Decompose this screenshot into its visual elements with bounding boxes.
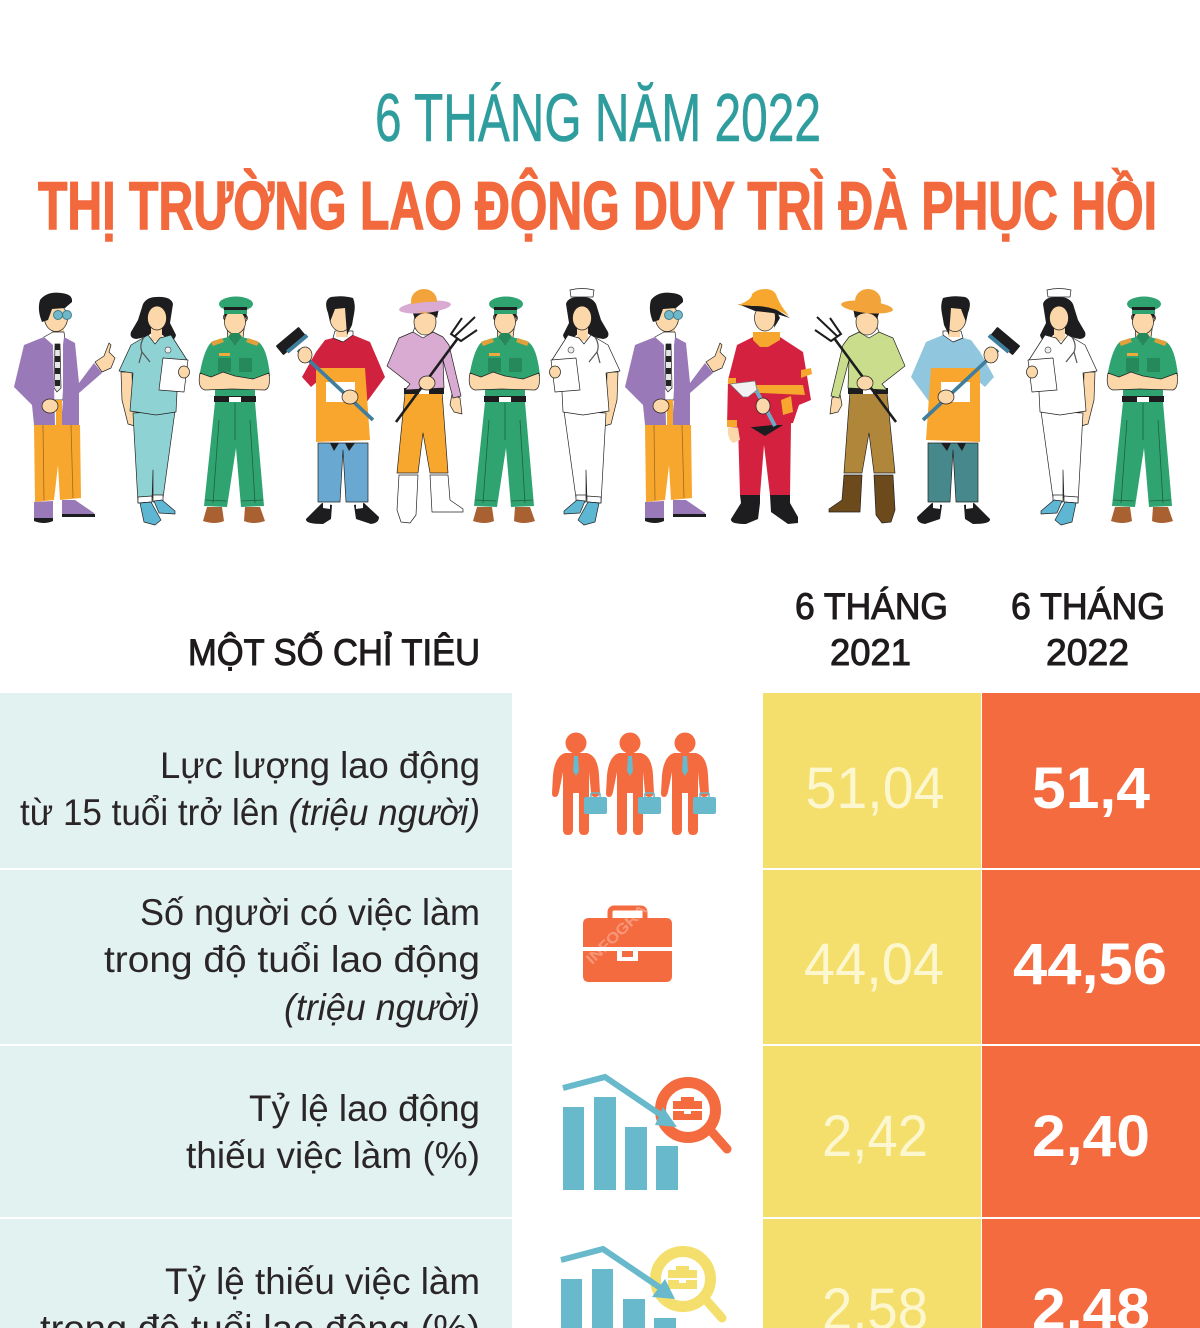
column heading: 6 months 2021: 6 THÁNG (795, 586, 948, 627)
panel: row 3 underemployment (0, 1046, 1200, 1217)
watermark on briefcase: INFOGRAPHICS (583, 865, 688, 968)
worker: farmer green (815, 289, 905, 523)
icon: falling bars with orange magnifier (563, 1077, 727, 1190)
row 2 label: Số người có việc làm (140, 892, 480, 933)
value 2022 row 3: 2,40 (1032, 1104, 1150, 1169)
row 1 label: từ 15 tuổi trở lên (triệu người) (20, 792, 480, 833)
worker: farmer pink (387, 289, 477, 523)
row 3 label (186, 1088, 480, 1176)
value 2022 row 4 (982, 1219, 1200, 1328)
value 2022 row 2: 44,56 (1013, 932, 1167, 997)
icon: three workers with briefcases (552, 732, 716, 835)
worker: businessman purple (625, 293, 726, 523)
column heading: indicators: MỘT SỐ CHỈ TIÊU (188, 631, 480, 673)
value 2022 row 1 (982, 693, 1200, 868)
row 2 label: trong độ tuổi lao động (104, 939, 480, 980)
illustration: row of workers (14, 288, 1178, 525)
row 1 background (0, 693, 512, 868)
worker: soldier (1107, 296, 1178, 523)
value 2021 row 2: 44,04 (804, 932, 944, 997)
row 1 label (20, 745, 480, 833)
icon: briefcase (583, 908, 672, 982)
value 2022 row 2 (982, 870, 1200, 1044)
worker: businessman purple (14, 293, 115, 523)
row 4 background (0, 1219, 512, 1328)
value 2021 row 3 (763, 1046, 981, 1217)
value 2021 row 1 (763, 693, 981, 868)
value 2021 row 3: 2,42 (822, 1104, 928, 1169)
column heading: 6 months 2021 (795, 586, 948, 673)
row 3 background (0, 1046, 512, 1217)
worker: nurse white (550, 288, 620, 525)
row 2 label (104, 892, 480, 1028)
row 3 label: thiếu việc làm (%) (186, 1135, 480, 1176)
worker: soldier (469, 296, 540, 523)
icon: falling bars with yellow magnifier (561, 1249, 722, 1328)
worker: nurse white (1026, 288, 1097, 525)
row 4 label: Tỷ lệ thiếu việc làm (165, 1261, 480, 1302)
value 2022 row 1: 51,4 (1032, 756, 1150, 821)
row 4 label (40, 1261, 480, 1328)
row 2 background (0, 870, 512, 1044)
row 3 label: Tỷ lệ lao động (249, 1088, 480, 1129)
panel: row 1 labour force (0, 693, 1200, 868)
panel: row 4 underemployment working age (0, 1219, 1200, 1328)
worker: soldier (199, 296, 270, 523)
worker: cleaner red (276, 296, 385, 524)
value 2021 row 4 (763, 1219, 981, 1328)
value 2022 row 3 (982, 1046, 1200, 1217)
worker: firefighter (727, 289, 812, 524)
column heading: 6 months 2022 (1011, 586, 1165, 673)
title line 1: 6 THÁNG NĂM 2022 (375, 80, 821, 156)
title (38, 80, 1157, 244)
worker: cleaner blue (911, 296, 1020, 524)
column heading: 6 months 2022: 6 THÁNG (1011, 586, 1165, 627)
value 2021 row 1: 51,04 (806, 756, 944, 821)
panel: row 2 employed (0, 865, 1200, 1044)
row 1 label: Lực lượng lao động (160, 745, 480, 786)
worker: nurse teal (119, 297, 190, 525)
column heading: 6 months 2021: 2021 (830, 632, 911, 673)
row 2 label: (triệu người) (284, 987, 480, 1028)
value 2021 row 2 (763, 870, 981, 1044)
column heading: 6 months 2022: 2022 (1046, 632, 1129, 673)
